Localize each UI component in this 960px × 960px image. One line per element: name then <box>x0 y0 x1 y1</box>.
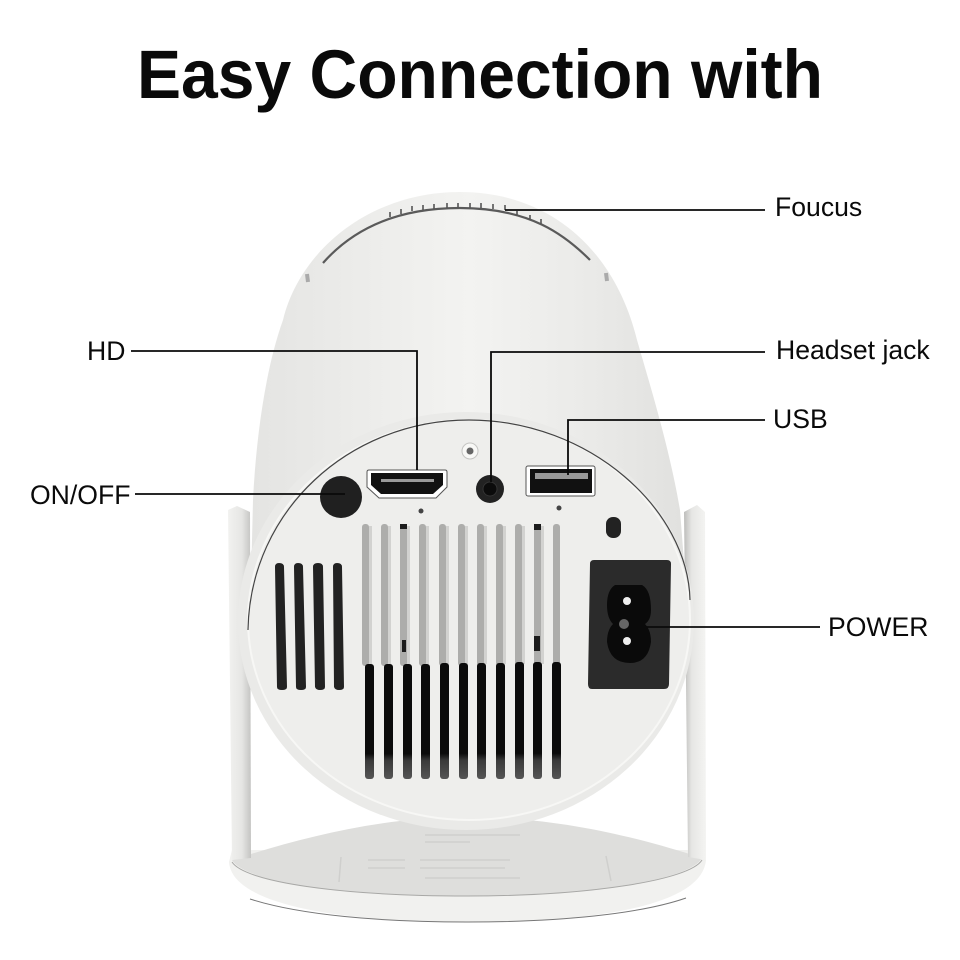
USB port <box>526 466 595 496</box>
callout: USB <box>568 404 828 475</box>
headset jack <box>476 475 504 503</box>
indicator dots <box>418 506 562 514</box>
title: Easy Connection with <box>137 36 823 113</box>
callout: Headset jack: Headset jack <box>776 335 930 365</box>
callout: HD: HD <box>87 336 125 366</box>
power button <box>320 476 362 518</box>
projector illustration <box>228 192 706 922</box>
callout: HD <box>87 336 417 470</box>
callout: Headset jack <box>491 335 930 482</box>
central vents <box>362 524 561 779</box>
reset slot <box>606 517 621 538</box>
left vents <box>275 563 344 690</box>
callout: ON/OFF: ON/OFF <box>30 480 130 510</box>
right stand arm <box>684 505 706 860</box>
projector body dome <box>250 192 690 640</box>
stand base <box>229 817 706 922</box>
power socket <box>588 560 671 689</box>
rear panel disc <box>238 412 694 830</box>
callout: Foucus: Foucus <box>775 192 862 222</box>
base label marks <box>339 835 611 882</box>
callout: USB: USB <box>773 404 828 434</box>
callout: POWER: POWER <box>828 612 928 642</box>
rear panel arc line <box>248 420 690 630</box>
HDMI port <box>367 470 447 498</box>
left stand arm <box>228 506 251 860</box>
focus ring <box>307 203 607 282</box>
screw <box>462 443 478 459</box>
